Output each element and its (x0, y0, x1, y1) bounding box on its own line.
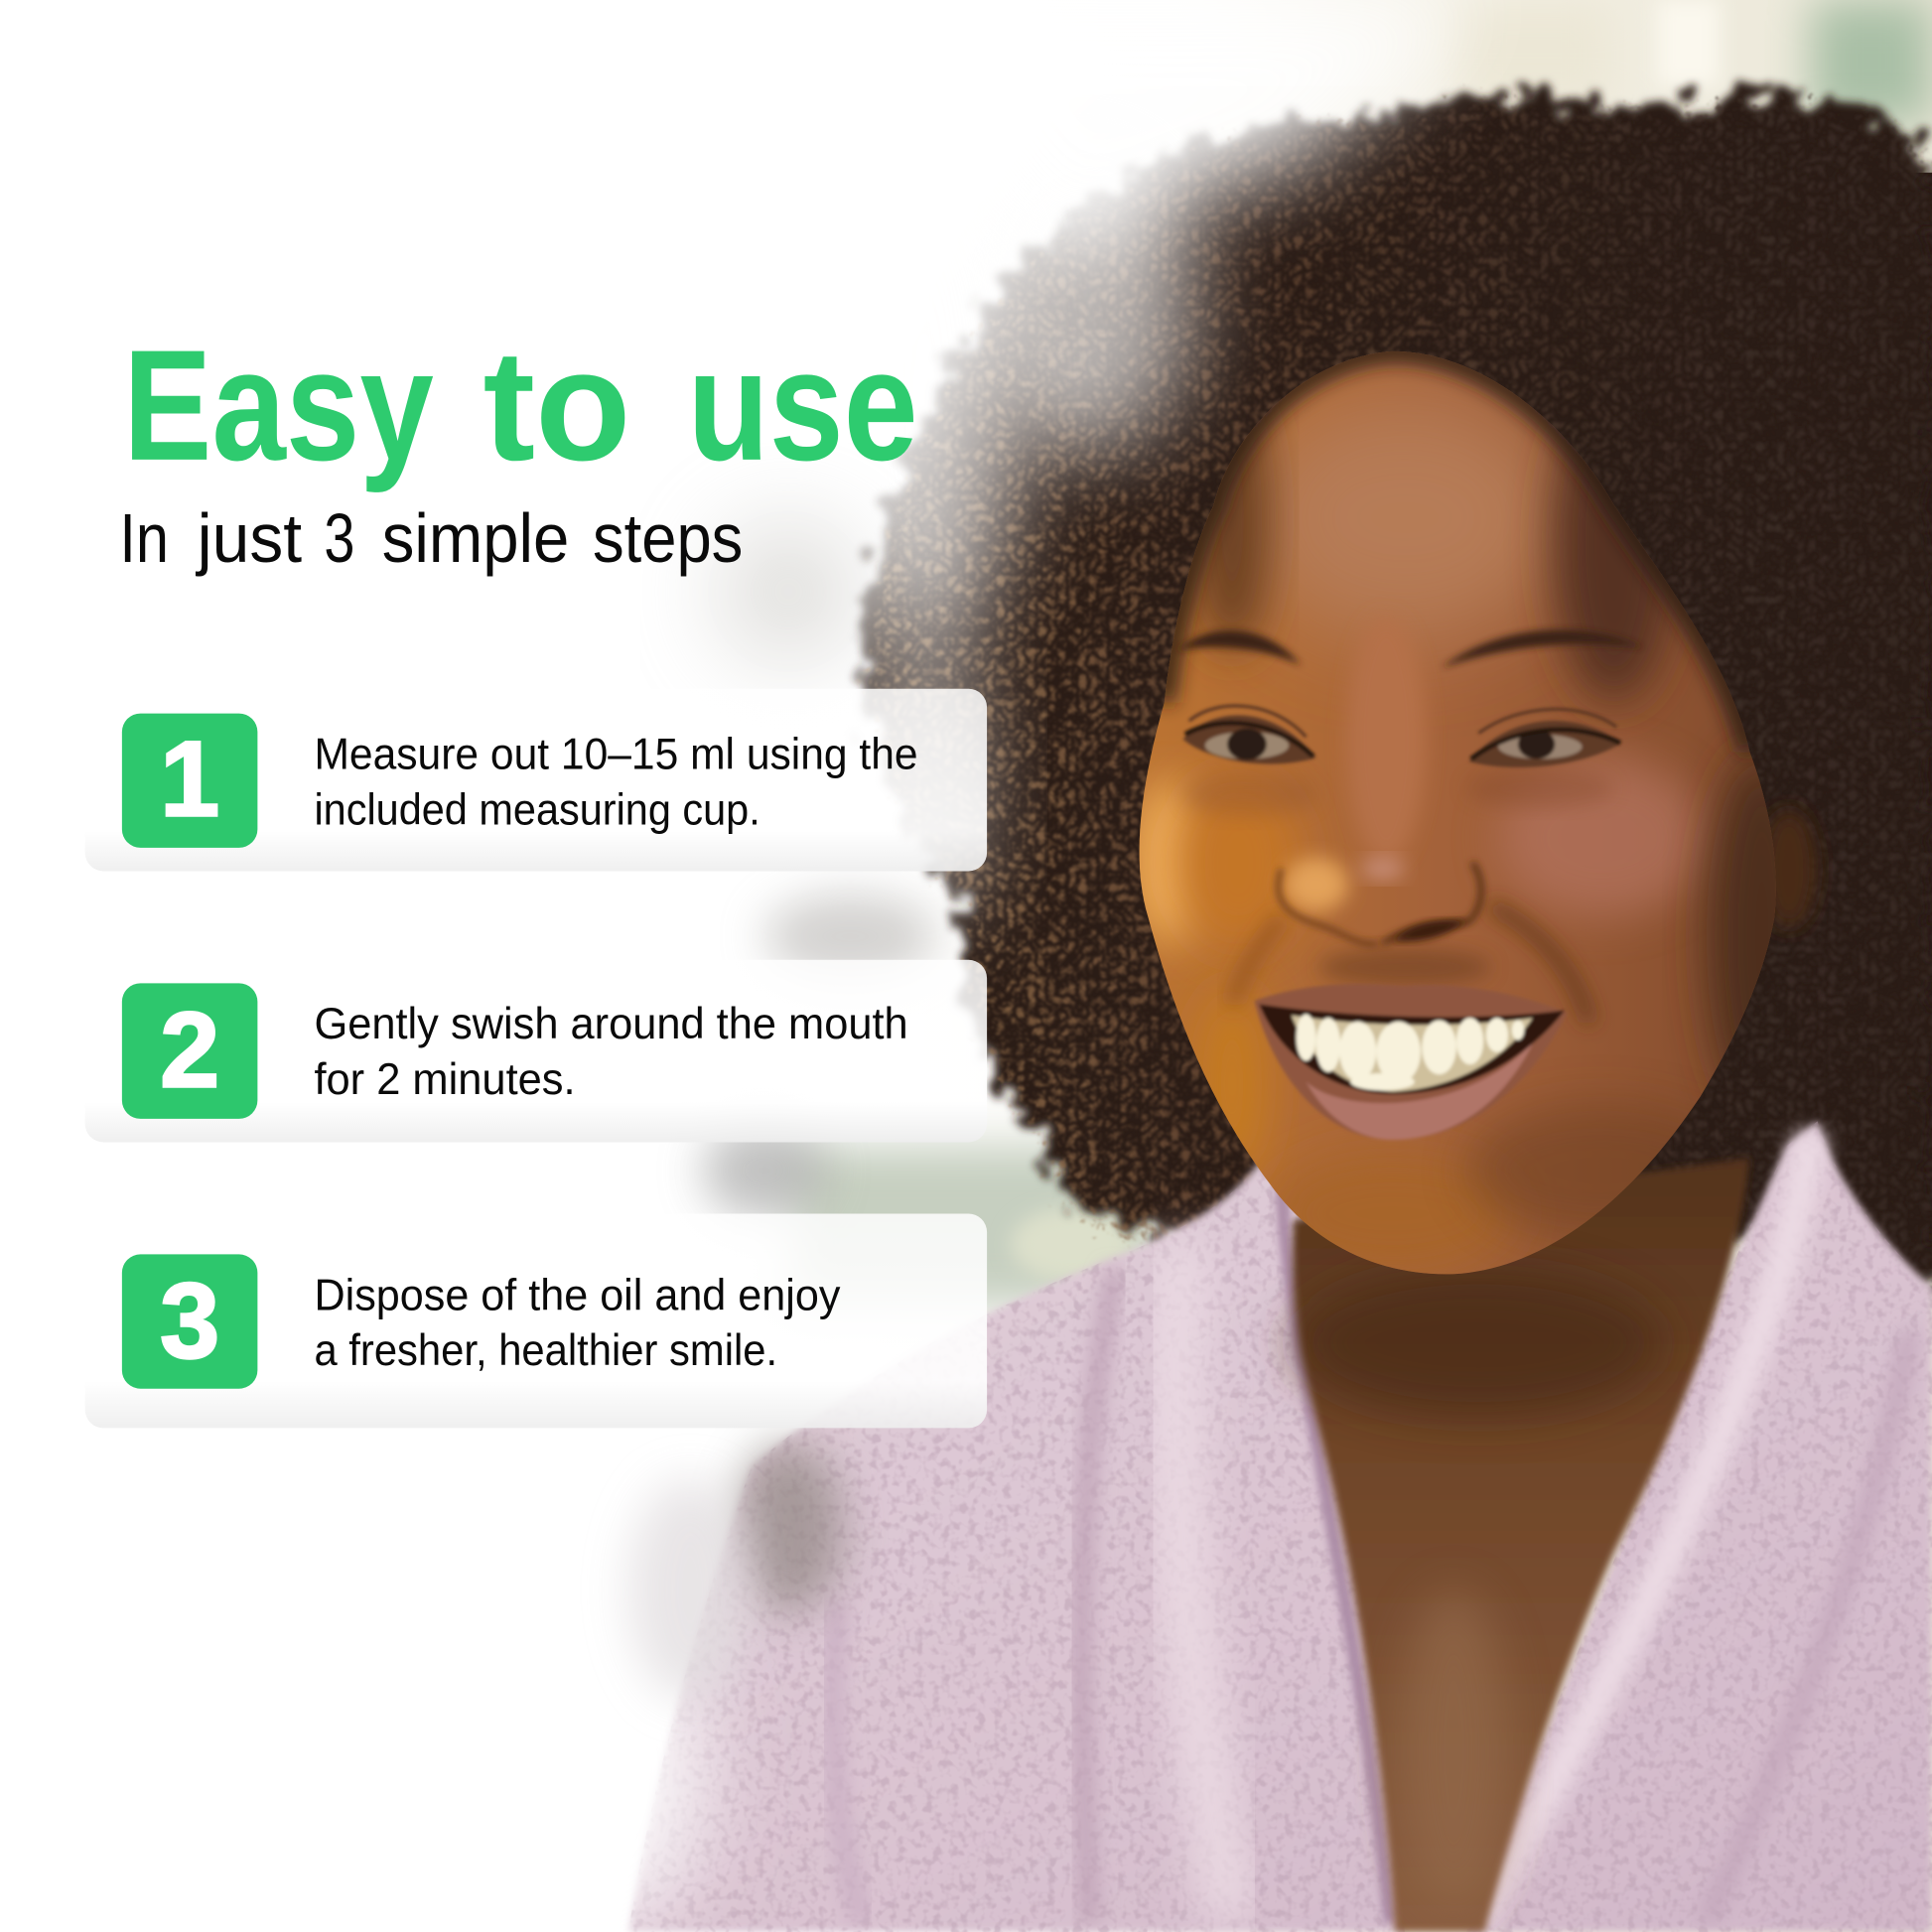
ear in shadow (1762, 809, 1816, 928)
step 2 card (85, 960, 987, 1142)
subtitle: In (119, 499, 169, 577)
subtitle: just (196, 499, 302, 577)
left eye (1182, 706, 1315, 763)
step 1 card (85, 689, 987, 871)
step 1 number badge (122, 714, 257, 848)
right eye (1468, 709, 1621, 767)
subtitle: 3 (324, 499, 354, 577)
step 1 text: Measure out 10–15 ml using the (314, 730, 918, 778)
step 3 number badge (122, 1254, 257, 1389)
neck and chest (1293, 1159, 1749, 1932)
nose (1278, 858, 1491, 987)
subtitle: simple (382, 499, 569, 577)
white fade and smoke (0, 0, 1478, 1932)
step 2 number badge: 2 (160, 990, 219, 1110)
robe lapel shading (833, 1134, 1910, 1922)
step 2 text (314, 1000, 908, 1104)
subtitle (119, 499, 743, 577)
step 3 text (314, 1271, 841, 1375)
subtitle: steps (593, 499, 743, 577)
smile (1254, 984, 1568, 1140)
step 1 text (314, 730, 918, 834)
robe (628, 1121, 1932, 1932)
title: to (483, 317, 630, 493)
step 2 text: for 2 minutes. (314, 1055, 576, 1104)
step 1 number badge: 1 (160, 719, 219, 839)
step 3 number badge: 3 (160, 1261, 219, 1381)
eyebrows (1176, 629, 1645, 668)
hair (862, 96, 1932, 1294)
step 2 number badge (122, 983, 257, 1119)
title (123, 317, 918, 493)
step 3 text: Dispose of the oil and enjoy (314, 1271, 841, 1319)
step 2 text: Gently swish around the mouth (314, 1000, 908, 1048)
title: Easy (123, 317, 434, 493)
step 3 text: a fresher, healthier smile. (314, 1326, 777, 1375)
face (1140, 351, 1822, 1275)
title: use (688, 317, 918, 493)
step 3 card (85, 1213, 987, 1428)
step 1 text: included measuring cup. (314, 785, 760, 834)
